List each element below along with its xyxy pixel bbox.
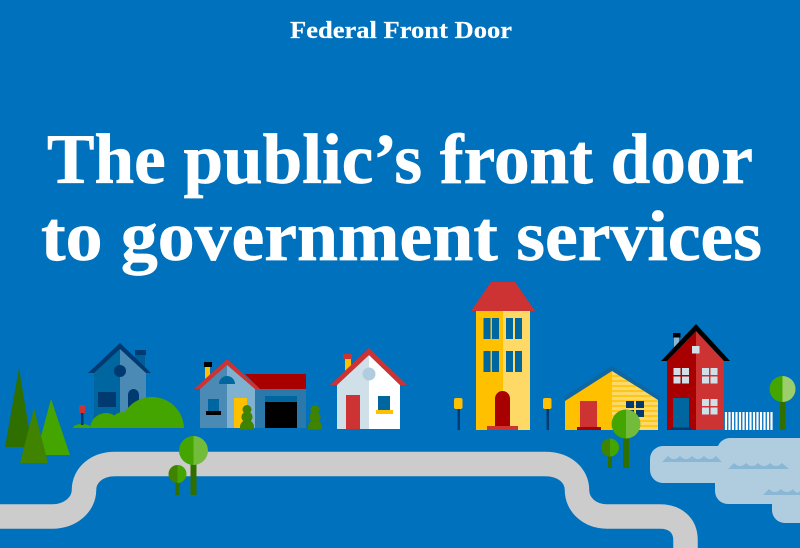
road — [0, 464, 686, 548]
right tree — [770, 376, 796, 430]
title: to government services — [41, 198, 762, 276]
navy house — [88, 343, 151, 428]
tower — [471, 282, 535, 430]
bush — [240, 405, 254, 430]
tree — [179, 436, 208, 495]
pine trees — [5, 368, 70, 463]
heading: Federal Front Door: Federal Front Door — [290, 18, 512, 44]
white house — [330, 348, 407, 429]
shrubs — [73, 397, 184, 428]
house with garage — [194, 359, 306, 428]
water — [650, 438, 800, 523]
street lamp — [543, 398, 552, 430]
title — [41, 121, 762, 276]
title: The public’s front door — [47, 121, 753, 199]
tree — [612, 410, 640, 468]
bush — [308, 405, 322, 430]
street lamp — [454, 398, 462, 430]
red house — [661, 324, 730, 430]
mailbox — [79, 405, 86, 425]
small tree — [601, 438, 619, 468]
small tree — [169, 465, 187, 495]
yellow house — [564, 366, 660, 430]
picket fence — [726, 412, 772, 430]
